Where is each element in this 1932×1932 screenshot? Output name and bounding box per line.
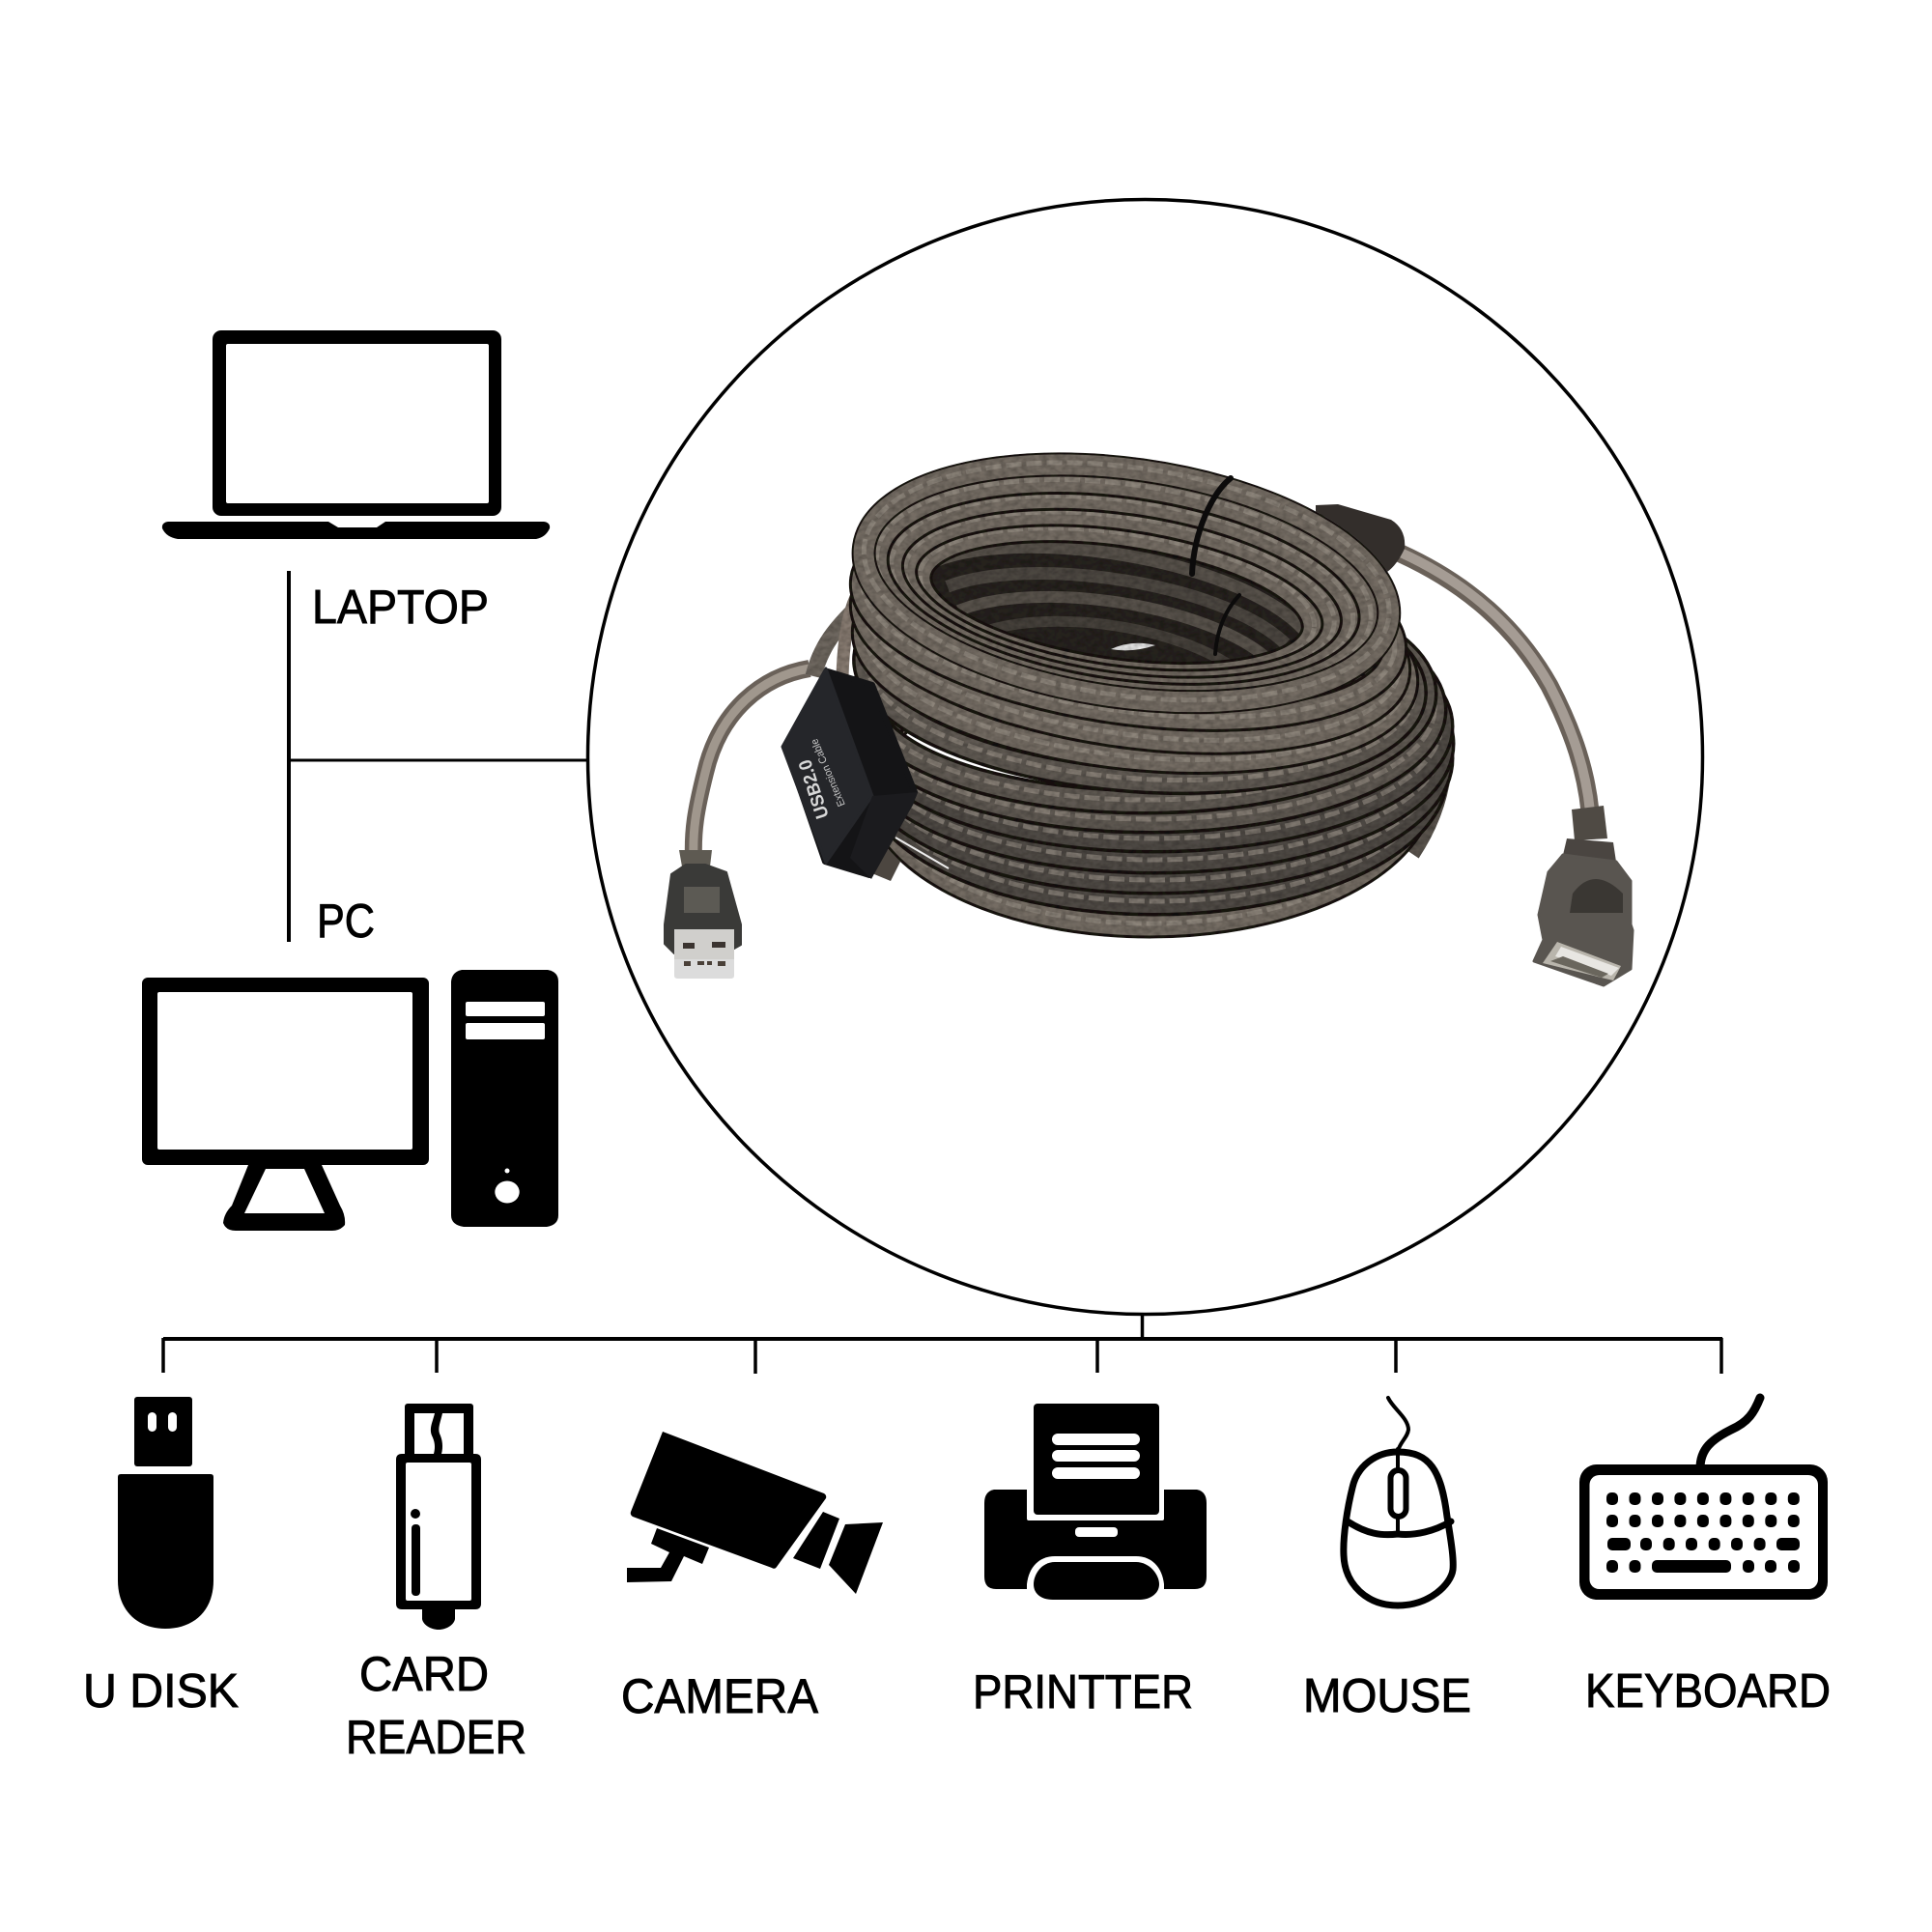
icon: mouse <box>1344 1398 1453 1605</box>
icon: printer <box>984 1404 1207 1600</box>
ferrite core <box>1316 504 1405 572</box>
signal booster box <box>782 668 918 879</box>
label: printer: PRINTTER <box>973 1666 1193 1719</box>
signal booster box: Extension Cable <box>809 737 848 809</box>
main circle <box>587 199 1702 1314</box>
label: camera: CAMERA <box>621 1669 819 1723</box>
USB female plug <box>1534 806 1633 985</box>
label: keyboard: KEYBOARD <box>1585 1665 1831 1718</box>
left cable <box>694 668 810 858</box>
label: PC: PC <box>317 895 375 948</box>
cable coil <box>813 432 1445 925</box>
icon: PC monitor and tower <box>142 970 558 1231</box>
connector lines: laptop and PC to circle <box>289 571 589 942</box>
label: laptop: LAPTOP <box>312 582 489 634</box>
icon: card reader <box>396 1404 481 1630</box>
back left strands <box>813 611 854 676</box>
monitor <box>142 978 429 1231</box>
top coil rings <box>848 432 1405 733</box>
label: card reader: READER <box>346 1712 526 1764</box>
cable ties <box>1192 478 1239 654</box>
right outer strand <box>1412 696 1445 854</box>
box text: USB2.0 <box>795 757 834 821</box>
label: card reader <box>346 1647 526 1764</box>
stacked lower strands <box>849 481 1442 925</box>
label: U disk: U DISK <box>83 1665 239 1718</box>
strain relief at box <box>857 835 900 881</box>
white gap in opening <box>1111 643 1155 650</box>
tower <box>451 970 558 1227</box>
icon: laptop <box>162 330 550 539</box>
white gap near box <box>895 838 949 868</box>
icon: U disk <box>118 1397 213 1629</box>
icon: camera <box>627 1432 883 1594</box>
connector tree: circle to peripherals <box>163 1314 1722 1374</box>
USB male plug <box>665 850 741 979</box>
icon: keyboard <box>1579 1398 1828 1600</box>
coil centre opening <box>905 497 1332 708</box>
label: mouse: MOUSE <box>1303 1670 1471 1722</box>
product photo: USB extension cable <box>665 432 1633 985</box>
label: card reader: CARD <box>359 1647 489 1701</box>
right cable <box>1401 553 1590 811</box>
